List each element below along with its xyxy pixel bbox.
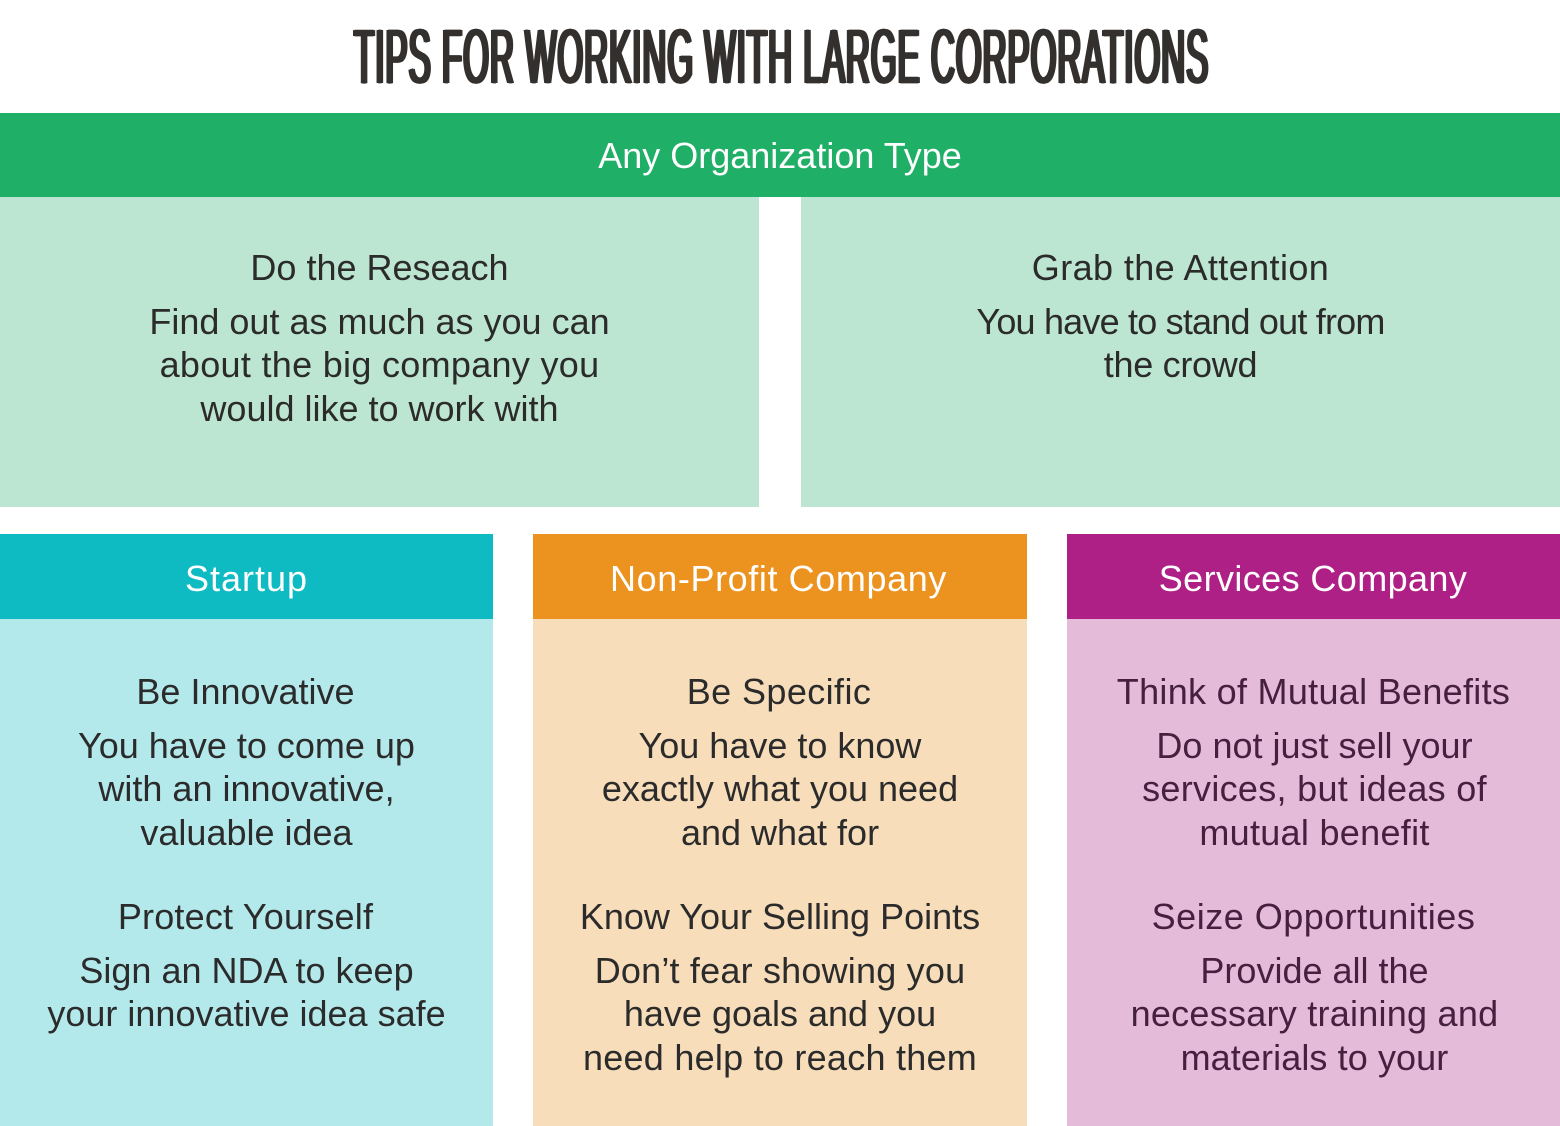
text: protect yourself body: your innovative idea safe	[47, 993, 446, 1034]
header: services company	[1067, 534, 1560, 619]
heading: protect yourself: Protect Yourself	[118, 896, 373, 937]
text: be innovative body: You have to come up	[78, 724, 415, 766]
text: be specific body: exactly what you need	[602, 768, 958, 809]
text: grab the attention body: You have to stand out from	[976, 300, 1385, 342]
heading: seize opportunities: Seize Opportunities	[1152, 896, 1475, 937]
panel: do the research	[0, 197, 759, 507]
text: know your selling points body	[583, 950, 977, 1078]
text: seize opportunities body: necessary training and	[1131, 993, 1498, 1034]
panel: any organization type header: Any Organization Type	[598, 135, 962, 176]
panel: non-profit company	[533, 534, 1027, 1126]
text: think of mutual benefits body: services, but ideas of	[1142, 768, 1487, 809]
text: do the research body: about the big company you	[160, 344, 599, 385]
text: be specific body: You have to know	[639, 724, 921, 766]
panel: any organization type header	[0, 113, 1560, 197]
text: be innovative body: with an innovative,	[98, 768, 395, 809]
text: be specific body	[602, 724, 958, 853]
heading: know your selling points: Know Your Selling Points	[580, 896, 980, 937]
header: non-profit company: Non-Profit Company	[610, 558, 947, 599]
text: grab the attention body	[976, 300, 1385, 385]
text: be innovative body: valuable idea	[140, 812, 353, 853]
heading: grab the attention: Grab the Attention	[1032, 247, 1329, 288]
text: protect yourself body	[47, 950, 446, 1034]
header: startup	[0, 534, 493, 619]
heading: be innovative: Be Innovative	[136, 671, 355, 712]
heading: be specific: Be Specific	[687, 671, 871, 712]
text: do the research body: would like to work with	[200, 388, 559, 429]
text: know your selling points body: need help to reach them	[583, 1037, 977, 1078]
text: grab the attention body: the crowd	[1104, 344, 1257, 385]
text: be specific body: and what for	[681, 812, 879, 853]
text: protect yourself body: Sign an NDA to keep	[79, 950, 414, 990]
text: know your selling points body: Don’t fear showing you	[595, 950, 965, 990]
text: do the research body	[149, 300, 610, 429]
text: seize opportunities body: materials to your	[1181, 1037, 1448, 1078]
text: think of mutual benefits body	[1142, 724, 1487, 853]
text: know your selling points body: have goals and you	[624, 993, 936, 1034]
header: services company: Services Company	[1159, 558, 1467, 599]
header: startup: Startup	[185, 558, 308, 599]
text: seize opportunities body	[1131, 950, 1498, 1078]
text: think of mutual benefits body: Do not just sell your	[1156, 724, 1473, 766]
title: TIPS FOR WORKING WITH LARGE CORPORATIONS	[354, 14, 1209, 100]
text: be innovative body	[78, 724, 415, 853]
heading: think of mutual benefits: Think of Mutual Benefits	[1117, 671, 1510, 712]
panel: grab the attention	[801, 197, 1560, 507]
text: do the research body: Find out as much as you can	[149, 300, 610, 342]
panel: startup	[0, 534, 493, 1126]
header: non-profit company	[533, 534, 1027, 619]
heading: do the research: Do the Reseach	[250, 247, 509, 288]
text: seize opportunities body: Provide all the	[1200, 950, 1429, 990]
text: think of mutual benefits body: mutual benefit	[1199, 812, 1430, 853]
panel: services company	[1067, 534, 1560, 1126]
